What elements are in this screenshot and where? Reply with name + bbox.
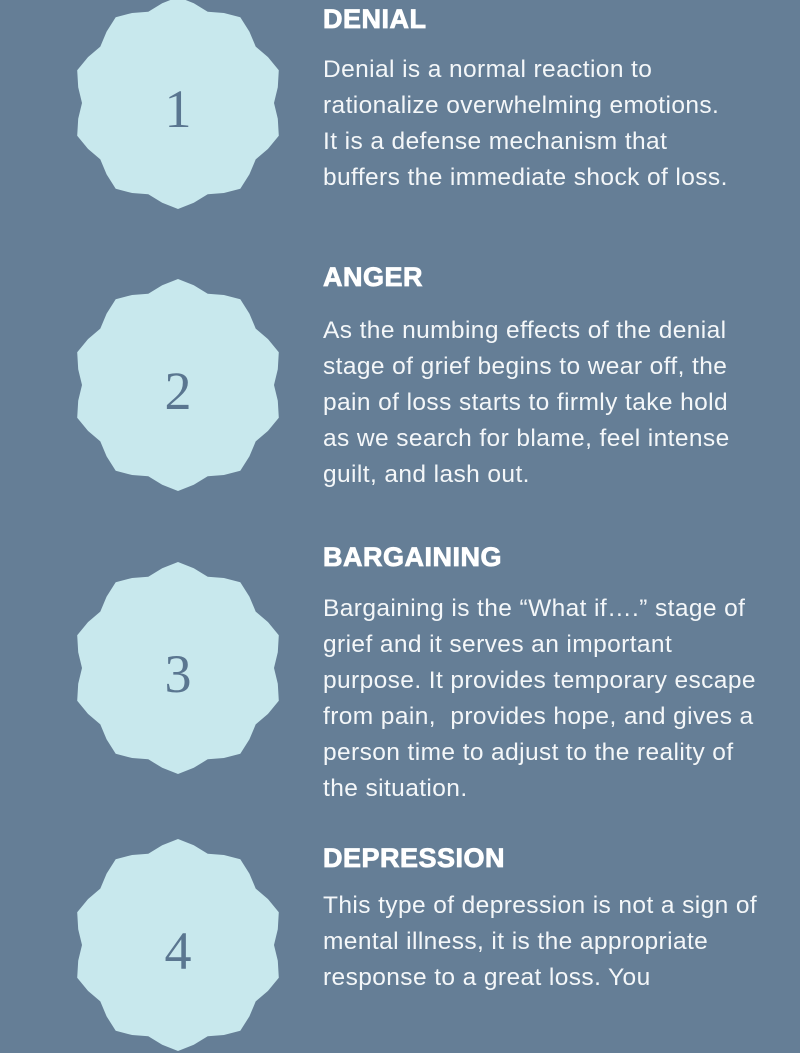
badge 2 — [77, 279, 279, 491]
text: bargaining — [323, 595, 756, 802]
text: denial — [323, 56, 728, 191]
text: depression: response to a great loss. You — [323, 964, 651, 991]
text: denial: It is a defense mechanism that — [323, 128, 667, 155]
badge 3 — [77, 562, 279, 774]
text: bargaining: the situation. — [323, 775, 468, 802]
text: denial: rationalize overwhelming emotions. — [323, 92, 719, 119]
text: anger: stage of grief begins to wear off, the — [323, 353, 727, 380]
text: bargaining: from pain, provides hope, and gives a — [323, 703, 754, 730]
text: anger: As the numbing effects of the denial — [323, 317, 726, 344]
text: bargaining: purpose. It provides temporary escape — [323, 667, 756, 694]
text: anger — [323, 317, 730, 488]
text: anger: as we search for blame, feel intense — [323, 425, 730, 452]
text: bargaining: person time to adjust to the reality of — [323, 739, 734, 766]
text: bargaining: Bargaining is the “What if….” stage of — [323, 595, 745, 622]
heading: denial: DENIAL — [323, 4, 426, 34]
badge 1: 1 — [164, 79, 192, 139]
text: denial: buffers the immediate shock of loss. — [323, 164, 728, 191]
badge 3: 3 — [164, 644, 192, 704]
text: anger: guilt, and lash out. — [323, 461, 530, 488]
badge 1 — [77, 0, 279, 209]
heading: depression: DEPRESSION — [323, 843, 505, 873]
text: anger: pain of loss starts to firmly take hold — [323, 389, 728, 416]
text: depression — [323, 892, 757, 991]
heading: anger: ANGER — [323, 262, 423, 292]
badge 2: 2 — [164, 361, 192, 421]
text: depression: This type of depression is not a sign of — [323, 892, 757, 919]
text: depression: mental illness, it is the appropriate — [323, 928, 708, 955]
text: denial: Denial is a normal reaction to — [323, 56, 652, 83]
heading: bargaining: BARGAINING — [323, 542, 502, 572]
text: bargaining: grief and it serves an important — [323, 631, 672, 658]
badge 4 — [77, 839, 279, 1051]
badge 4: 4 — [164, 921, 192, 981]
